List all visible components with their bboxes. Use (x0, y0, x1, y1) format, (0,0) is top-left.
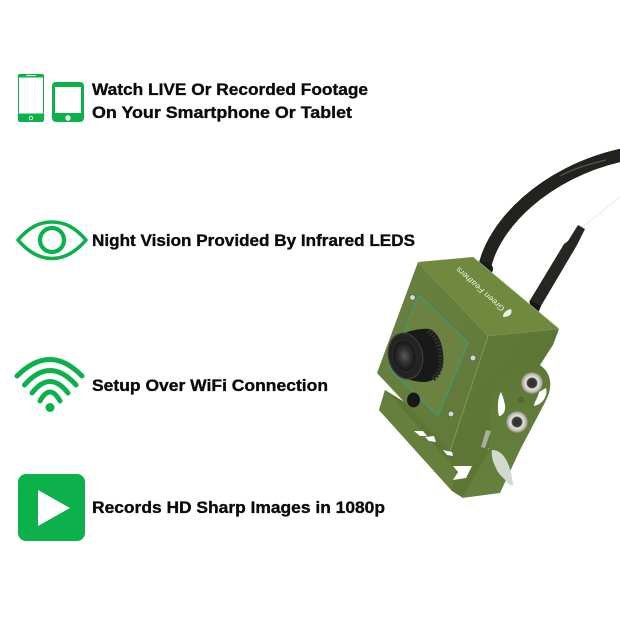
feature: night vision (18, 222, 415, 258)
camera body (377, 257, 559, 451)
bolts (521, 372, 543, 394)
antenna (529, 225, 585, 316)
icon: smartphone (18, 74, 44, 122)
circuit board (389, 295, 468, 416)
icon: wifi (17, 360, 82, 412)
text: wifi setup: Setup Over WiFi Connection (92, 376, 328, 395)
antenna wire (584, 197, 620, 226)
product photo: green camera (377, 155, 620, 498)
icon: tablet (52, 82, 84, 122)
text: night vision: Night Vision Provided By Infrared LEDS (92, 231, 415, 250)
feather logo (492, 450, 513, 485)
text: HD recording: Records HD Sharp Images in 1080p (92, 498, 385, 517)
bracket hinge slot (481, 430, 491, 448)
cable (475, 155, 620, 276)
text: watch footage: Watch LIVE Or Recorded Footage (92, 80, 368, 99)
feather logo on top (503, 309, 512, 317)
IR sensor (407, 392, 420, 408)
lens (384, 329, 443, 382)
feature: wifi setup (17, 360, 328, 412)
brand label: Green Feathers (454, 265, 506, 313)
text: watch footage: On Your Smartphone Or Tablet (92, 103, 352, 122)
screws (410, 295, 415, 300)
icon: play button (18, 474, 85, 541)
mount side plate (462, 362, 550, 498)
icon: eye (18, 222, 86, 258)
feature: phone and tablet footage (18, 74, 368, 122)
text: watch footage (92, 80, 368, 122)
feature: HD recording (18, 474, 385, 541)
mount bracket base (379, 390, 490, 498)
